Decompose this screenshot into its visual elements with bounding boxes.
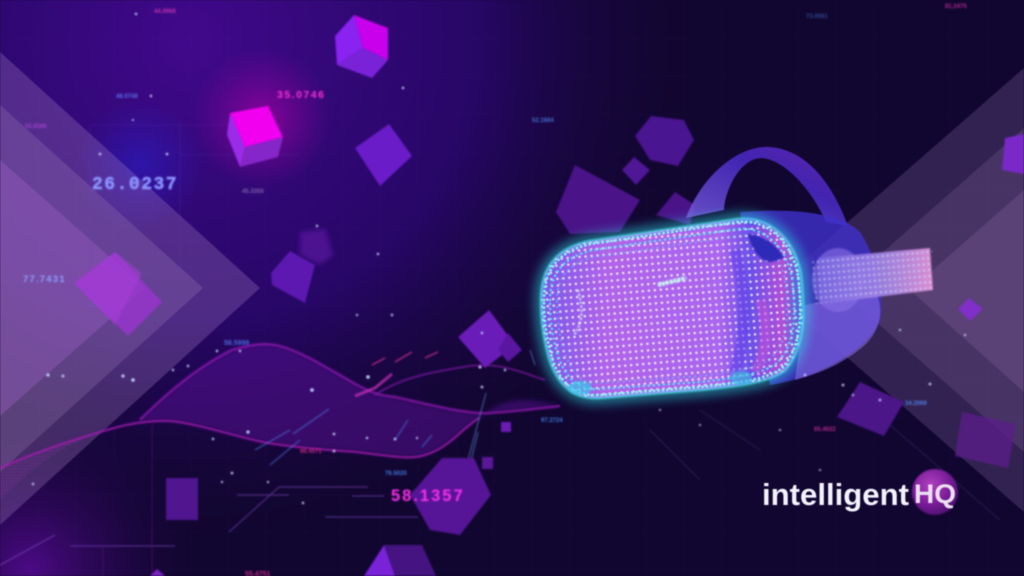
data number: 77.7431: 77.7431	[23, 274, 66, 285]
right chevron panels	[770, 68, 1024, 512]
floating cube: bottom square	[166, 478, 198, 520]
translucent cube: left	[74, 252, 162, 336]
faint data labels: 34.2069	[905, 401, 927, 407]
faint data labels: 76.5020	[385, 471, 407, 477]
faint data labels: 45.3355	[242, 189, 264, 195]
logo: intelligent HQ: intelligent	[762, 477, 909, 512]
purple data wave	[0, 344, 560, 500]
faint data labels: 48.0748	[116, 94, 138, 100]
top head strap	[686, 147, 848, 226]
faint data labels: 55.6586	[25, 124, 47, 130]
faint data labels: 52.1684	[532, 118, 554, 124]
face dot matrix	[541, 219, 803, 398]
faint data labels: 81.2475	[945, 4, 967, 10]
data number: 26.0237: 26.0237	[92, 175, 178, 195]
data number: 58.1357: 58.1357	[391, 487, 465, 505]
sensor details	[568, 234, 784, 395]
faint data labels: 44.0968	[154, 9, 176, 15]
side strap	[812, 248, 933, 312]
floating cube: bottom edge	[364, 545, 436, 576]
left chevron panels	[0, 52, 260, 525]
headset	[541, 147, 933, 398]
faint data labels: 65.4022	[814, 427, 836, 433]
faint data labels: 86.4571	[300, 449, 322, 455]
faint data labels: 73.0581	[806, 14, 828, 20]
floating cube: pair by grid	[271, 229, 333, 303]
floating cube: centre diamond	[458, 310, 522, 368]
cubes behind headset	[556, 116, 695, 234]
particle points	[32, 13, 966, 504]
small cubes	[150, 298, 983, 576]
floating cube: magenta glowing	[227, 106, 283, 167]
floating cube: top	[335, 15, 388, 78]
cubes right side	[837, 134, 1024, 468]
front face glow	[541, 219, 803, 398]
faint data labels: 97.2724	[541, 418, 563, 424]
faint data labels: 58.5998	[224, 340, 249, 347]
floating cube: bottom centre with number	[410, 458, 491, 535]
logo: intelligent HQ	[762, 469, 958, 515]
background streaks	[0, 120, 1000, 576]
logo: intelligent HQ: HQ	[914, 479, 956, 509]
front face	[541, 219, 803, 398]
data number: 35.0746: 35.0746	[277, 89, 325, 101]
floating cube: right of magenta	[355, 124, 412, 186]
cyan dotted rim	[541, 219, 803, 398]
headset body	[740, 211, 881, 385]
